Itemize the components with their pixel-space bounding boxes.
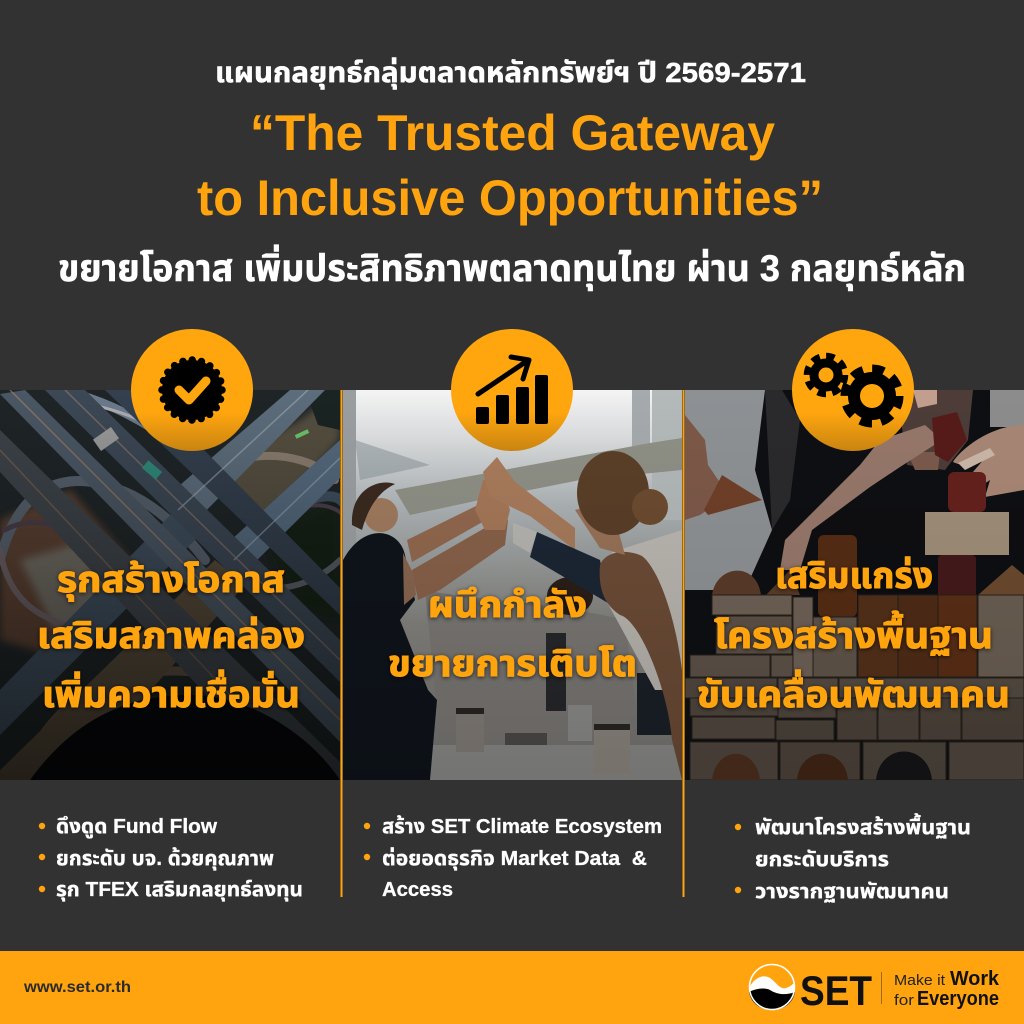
- list: column 3: ยกระดับบริการ: [755, 849, 889, 871]
- list: column 2: สร้าง SET Climate Ecosystem: [382, 816, 662, 838]
- headline line 1: “The Trusted Gateway: [250, 105, 775, 161]
- list: column 3: [735, 813, 971, 903]
- logo: SET: for: [894, 992, 914, 1009]
- panel title: collaboration: ผนึกกำลัง: [428, 584, 587, 625]
- panel title: opportunities: รุกสร้างโอกาส: [57, 559, 285, 601]
- list: column 2: Access: [382, 879, 453, 901]
- table: [430, 745, 682, 780]
- panel: highway photo: [0, 390, 345, 780]
- logo: SET: [749, 964, 1000, 1014]
- list: column 1: รุก TFEX เสริมกลยุทธ์ลงทุน: [56, 879, 303, 901]
- panel title: opportunities: เพิ่มความเชื่อมั่น: [42, 669, 300, 715]
- list: column 3: วางรากฐานพัฒนาคน: [755, 881, 949, 903]
- right woman: [606, 530, 682, 690]
- panel title: collaboration: ขยายการเติบโต: [388, 643, 637, 684]
- red blocks: [932, 412, 967, 462]
- website: www.set.or.th: [23, 979, 131, 996]
- face: [897, 390, 973, 470]
- back woman: [364, 498, 398, 532]
- seated man: [426, 592, 624, 636]
- subtitle: ขยายโอกาส เพิ่มประสิทธิภาพตลาดทุนไทย ผ่าน 3 กลยุทธ์หลัก: [58, 244, 966, 291]
- shirt: [685, 390, 772, 590]
- panel title: opportunities: เสริมสภาพคล่อง: [37, 615, 305, 656]
- list: column 1: [39, 816, 303, 901]
- list: column 2: [364, 816, 662, 901]
- icon: growth chart: [451, 329, 573, 451]
- panel title: infrastructure: [697, 555, 1010, 715]
- beige block: [925, 512, 1009, 555]
- dark field: [30, 695, 340, 780]
- list: column 2: ต่อยอดธุรกิจ Market Data &: [382, 848, 647, 870]
- panel title: infrastructure: โครงสร้างพื้นฐาน: [714, 610, 993, 656]
- glowing details: [93, 427, 119, 451]
- triangle: [978, 565, 1024, 595]
- block wall: [685, 595, 1024, 780]
- title: plan name: แผนกลยุทธ์กลุ่มตลาดหลักทรัพย์ฯ ปี 2569-2571: [215, 57, 806, 89]
- logo: SET: Make it: [894, 972, 946, 989]
- white cuff: [513, 523, 537, 553]
- woman arm: [780, 425, 942, 570]
- icon: verified badge: [131, 329, 253, 451]
- list: column 1: ดึงดูด Fund Flow: [56, 816, 217, 838]
- dark sleeve: [530, 532, 608, 603]
- panel: team high-five photo: [343, 390, 683, 780]
- front woman: [343, 533, 437, 780]
- panel title: opportunities: [37, 559, 305, 715]
- logo: SET: Work: [950, 968, 1000, 990]
- icon: gears: [792, 329, 914, 451]
- column dividers: [340, 390, 684, 897]
- dark pants: [637, 673, 673, 735]
- right hand: [953, 425, 1024, 497]
- panel title: infrastructure: เสริมแกร่ง: [775, 555, 933, 596]
- footer bar: [0, 951, 1024, 1024]
- lower left roads: [0, 560, 245, 780]
- panel: building blocks photo: [685, 390, 1024, 780]
- list: column 3: พัฒนาโครงสร้างพื้นฐาน: [755, 813, 971, 839]
- right woman's arm: [483, 457, 575, 550]
- header: [58, 57, 966, 291]
- left hand: [685, 415, 719, 520]
- tall cylinder: [818, 535, 857, 617]
- panel title: infrastructure: ขับเคลื่อนพัฒนาคน: [697, 669, 1010, 715]
- panel title: collaboration: [388, 584, 637, 684]
- main diagonal roads: [0, 390, 340, 742]
- list: column 1: ยกระดับ บจ. ด้วยคุณภาพ: [56, 848, 274, 870]
- logo: SET: Everyone: [917, 988, 999, 1010]
- ceiling beam: [395, 438, 682, 515]
- loops: [0, 393, 340, 730]
- headline line 2: to Inclusive Opportunities”: [197, 170, 823, 226]
- logo: SET: SET: [800, 967, 872, 1014]
